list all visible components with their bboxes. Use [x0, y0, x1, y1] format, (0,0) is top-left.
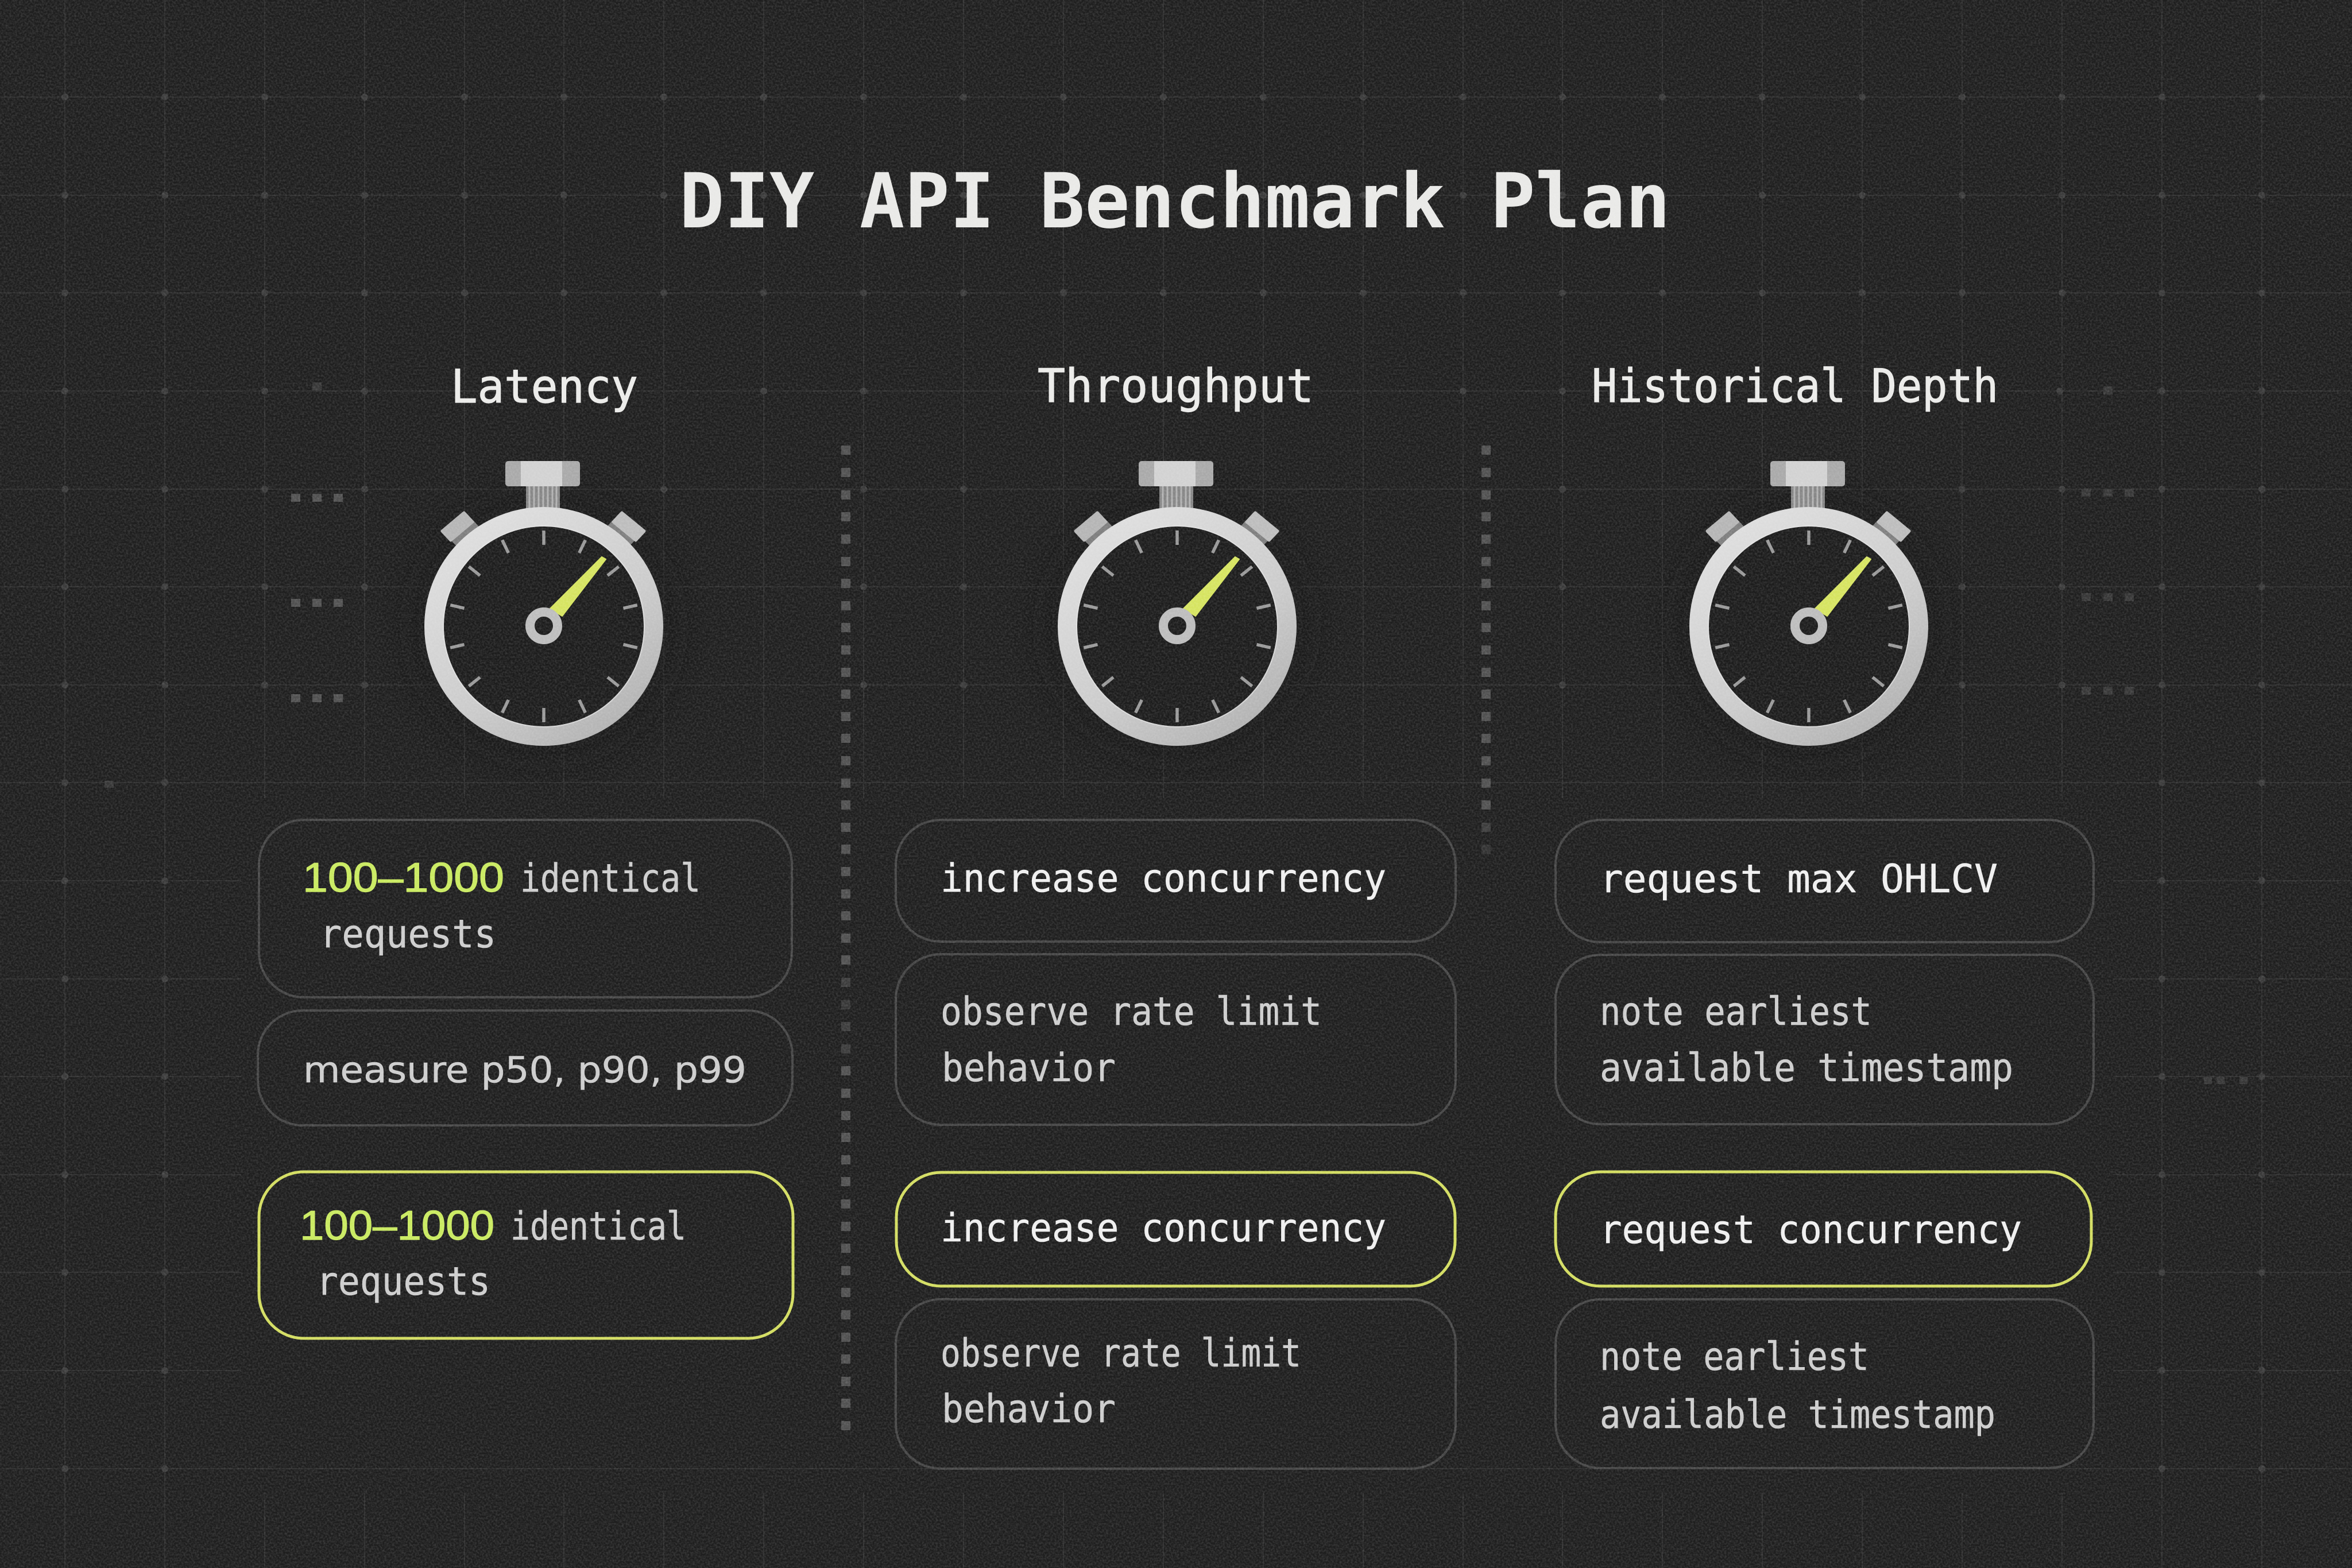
stray markers: [105, 382, 2247, 1084]
title: DIY API Benchmark Plan: [679, 157, 1670, 246]
card: observe rate limit behavior, repeat: behavior: [942, 1387, 1116, 1432]
card: note earliest available timestamp, repeat: available timestamp: [1600, 1392, 1995, 1438]
card: 100–1000 identical requests: identical: [520, 856, 701, 901]
card: highlighted increase concurrency: increase concurrency: [941, 1206, 1386, 1251]
divider: dotted right: [1481, 446, 1491, 854]
card: highlighted request concurrency: request concurrency: [1600, 1207, 2022, 1253]
card: note earliest available timestamp: available timestamp: [1600, 1046, 2013, 1091]
card: highlighted 100–1000 identical requests: requests: [316, 1259, 490, 1304]
heading: Throughput: Throughput: [1038, 359, 1314, 413]
card: measure percentiles: measure p50, p90, p99: [303, 1049, 746, 1091]
card: observe rate limit behavior: behavior: [942, 1046, 1116, 1091]
side markers: left: [291, 494, 343, 702]
heading: Historical Depth: Historical Depth: [1592, 359, 1998, 413]
card: observe rate limit behavior, repeat: observe rate limit: [941, 1331, 1301, 1376]
card: highlighted 100–1000 identical requests: [259, 1172, 793, 1338]
card: request max OHLCV: request max OHLCV: [1600, 857, 1998, 902]
card: request max OHLCV: [1556, 820, 2094, 942]
icon: stopwatch Historical Depth: [1674, 461, 1944, 761]
card: observe rate limit behavior, repeat: [896, 1299, 1456, 1469]
column: Historical Depth: [1556, 359, 2094, 1468]
side markers: right: [2082, 489, 2134, 695]
card: highlighted 100–1000 identical requests: 100–1000: [300, 1203, 494, 1249]
card: 100–1000 identical requests: requests: [320, 912, 496, 957]
card: highlighted request concurrency: [1556, 1172, 2091, 1286]
card: note earliest available timestamp, repeat: [1556, 1299, 2094, 1468]
card: increase concurrency: increase concurrency: [941, 856, 1386, 901]
card: note earliest available timestamp: note earliest: [1600, 989, 1872, 1035]
icon: stopwatch Latency: [409, 461, 679, 761]
card: observe rate limit behavior: [896, 954, 1456, 1125]
card: highlighted 100–1000 identical requests: identical: [510, 1204, 686, 1249]
card: note earliest available timestamp, repeat: note earliest: [1600, 1334, 1869, 1380]
column: Throughput: [896, 359, 1456, 1469]
divider: dotted left: [841, 446, 850, 1430]
card: increase concurrency: [896, 820, 1456, 942]
card: note earliest available timestamp: [1556, 955, 2094, 1124]
icon: stopwatch Throughput: [1042, 461, 1312, 761]
card: measure percentiles: [258, 1011, 792, 1125]
card: observe rate limit behavior: observe rate limit: [941, 989, 1322, 1035]
column: Latency: [258, 360, 793, 1338]
card: 100–1000 identical requests: [259, 820, 792, 997]
card: 100–1000 identical requests: 100–1000: [303, 855, 504, 901]
card: highlighted increase concurrency: [896, 1172, 1455, 1286]
heading: Latency: Latency: [451, 360, 638, 413]
